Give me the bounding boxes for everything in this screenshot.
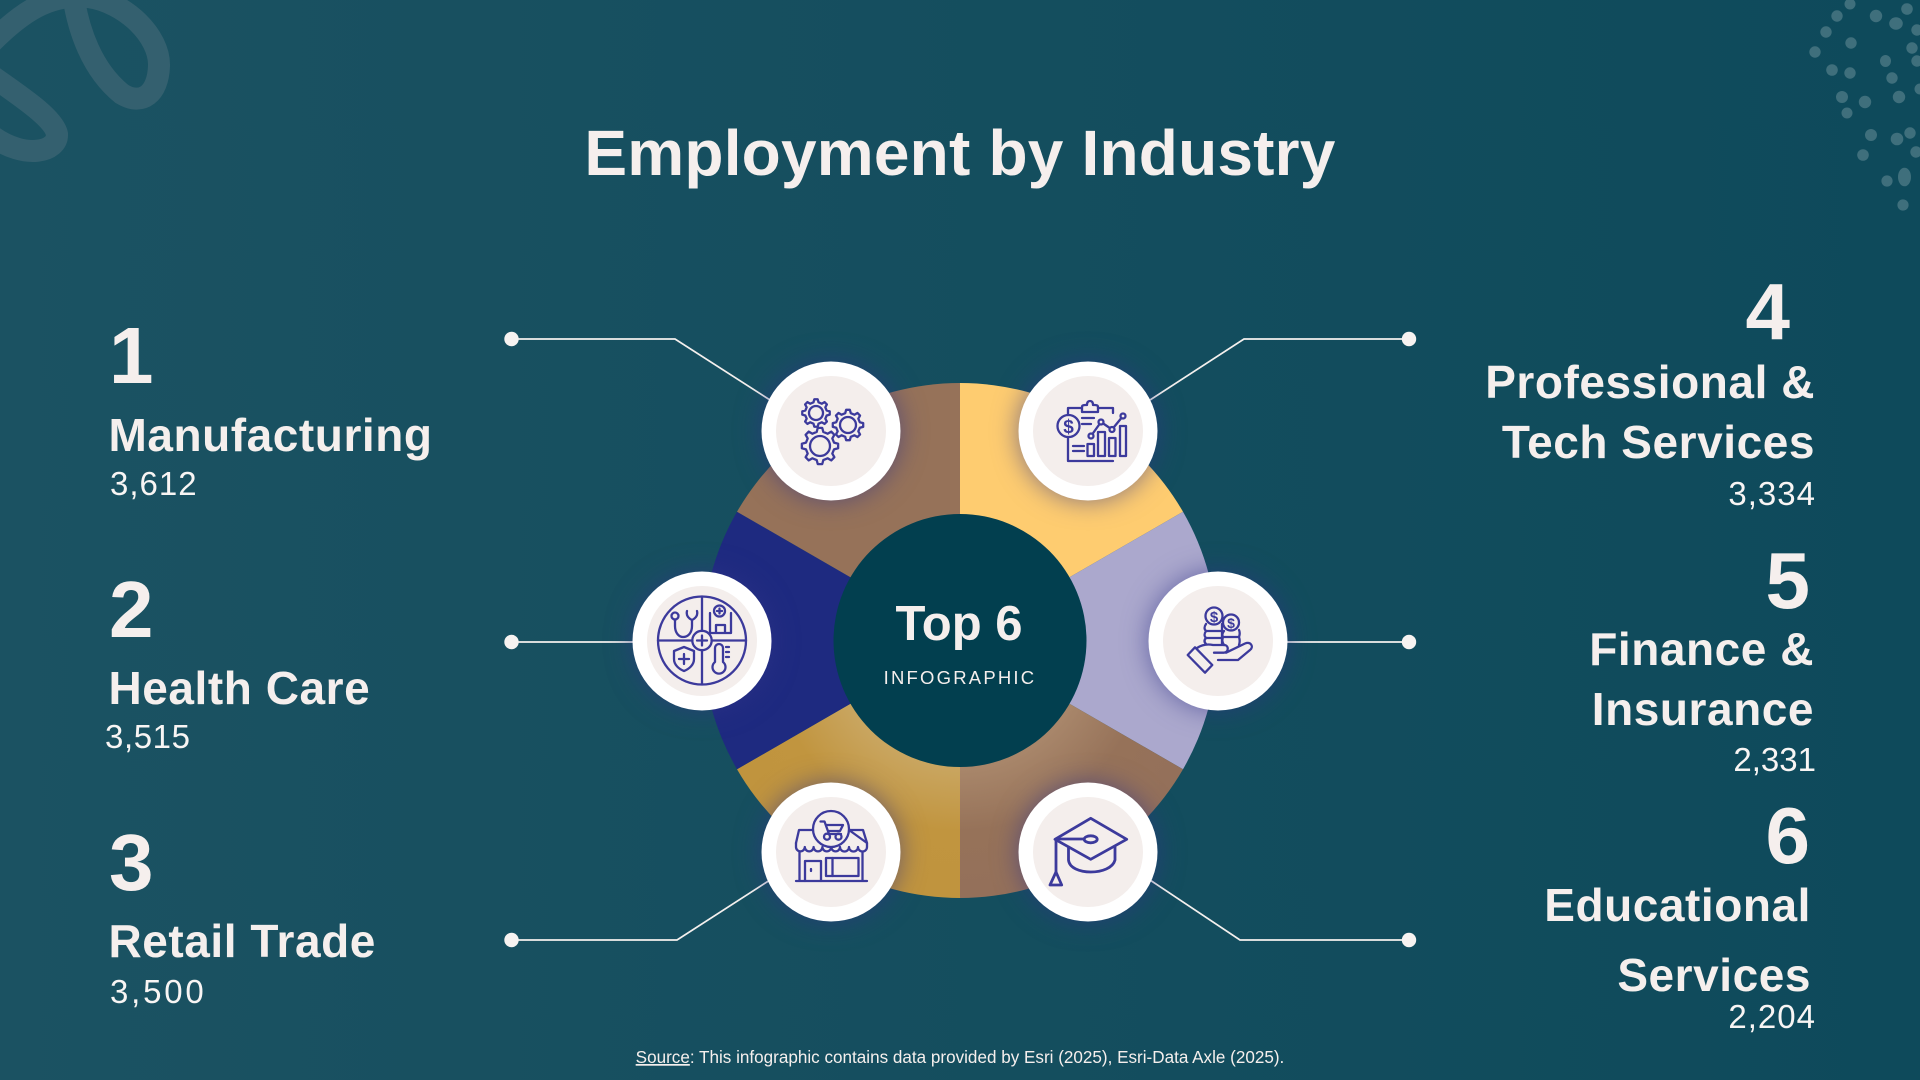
donut chart: [703, 383, 1217, 898]
item 3: retail trade: [108, 818, 376, 1010]
item 3: retail trade: 3,500: [110, 973, 207, 1010]
item 5: finance and insurance: Insurance: [1592, 683, 1814, 735]
item 5: finance and insurance: 2,331: [1733, 741, 1816, 778]
item 2: health care: 2: [109, 565, 154, 654]
item 4: professional and tech services: Professional &: [1485, 356, 1815, 408]
item 5: finance and insurance: Finance &: [1589, 623, 1814, 675]
item 1: manufacturing: 1: [109, 311, 154, 400]
center hub: Top 6: [895, 597, 1023, 651]
connector end dots: [504, 332, 1416, 947]
icon: hand with coins: $: [1210, 609, 1219, 626]
title: Employment by Industry: [584, 117, 1336, 189]
item 1: manufacturing: 3,612: [110, 465, 198, 502]
center hub: [834, 514, 1086, 767]
icon: hand with coins: [1148, 572, 1288, 710]
item 6: educational services: 2,204: [1728, 998, 1816, 1035]
item 4: professional and tech services: [1485, 267, 1816, 512]
item 2: health care: [105, 565, 370, 755]
item 2: health care: Health Care: [108, 662, 370, 714]
item 2: health care: 3,515: [105, 718, 191, 755]
item 4: professional and tech services: 3,334: [1728, 475, 1816, 512]
item 6: educational services: Services: [1617, 949, 1811, 1001]
source note: Source: This infographic contains data provided by Esri (2025), Esri-Data Axle (2025).: [636, 1048, 1284, 1067]
item 5: finance and insurance: [1589, 536, 1816, 778]
icon: graduation cap: [1018, 782, 1158, 922]
decoration: dots top right: [1809, 0, 1920, 211]
icon: gears: [762, 362, 900, 500]
icon: hand with coins: $: [1227, 615, 1235, 631]
item 6: educational services: Educational: [1544, 879, 1811, 931]
item 3: retail trade: 3: [109, 818, 154, 907]
item 4: professional and tech services: Tech Services: [1502, 416, 1815, 468]
item 6: educational services: 6: [1766, 791, 1810, 880]
icon: clipboard chart: $: [1063, 417, 1074, 438]
decoration: swirl top left: [0, 0, 159, 151]
icon: clipboard chart: [1018, 362, 1158, 500]
connector lines: [511, 339, 1409, 940]
item 3: retail trade: Retail Trade: [108, 915, 376, 967]
item 5: finance and insurance: 5: [1766, 536, 1810, 625]
item 6: educational services: [1544, 791, 1816, 1035]
item 1: manufacturing: Manufacturing: [108, 409, 433, 461]
icon: retail store: [762, 782, 900, 922]
icon: health care: [632, 572, 772, 710]
item 4: professional and tech services: 4: [1746, 267, 1790, 356]
center hub: INFOGRAPHIC: [884, 667, 1036, 688]
item 1: manufacturing: [108, 311, 433, 502]
